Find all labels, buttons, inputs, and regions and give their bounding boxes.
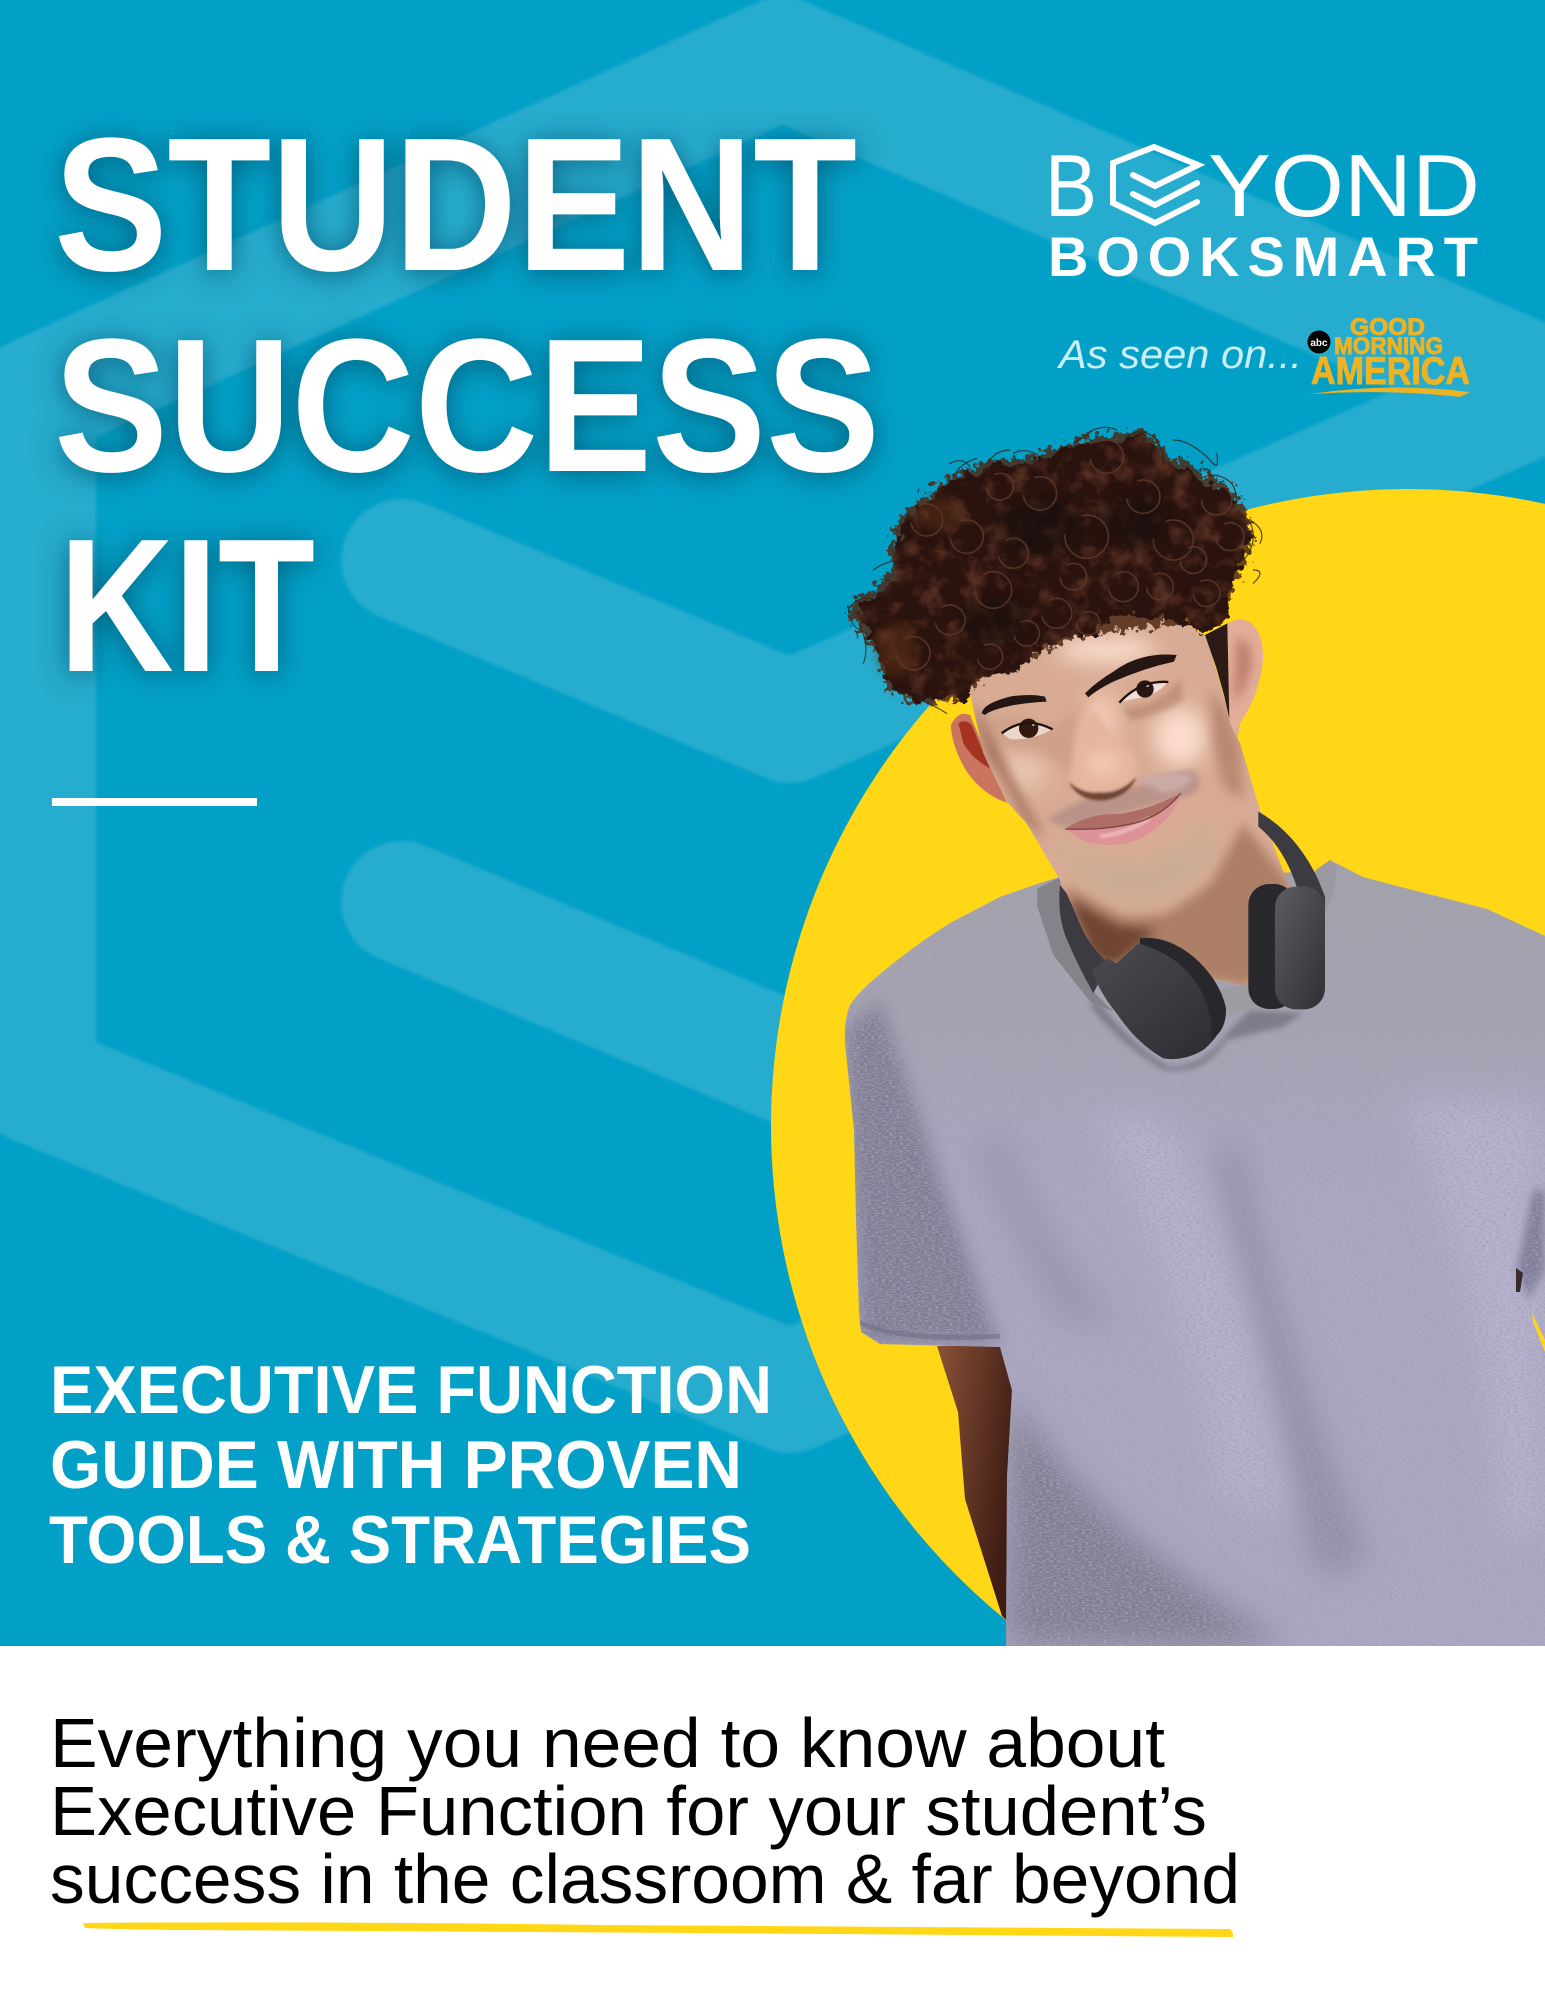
as seen on: As seen on... xyxy=(1057,333,1302,377)
icon: book hexagon xyxy=(1113,147,1198,223)
head and neck skin xyxy=(970,610,1293,987)
left ear xyxy=(951,714,1007,803)
frizz outline xyxy=(847,431,1252,703)
main curls mass xyxy=(857,437,1248,700)
logo: Good Morning America: MORNING xyxy=(1334,333,1443,360)
subtitle: TOOLS & STRATEGIES xyxy=(49,1502,751,1578)
t-shirt xyxy=(840,860,1545,1650)
flyaway strands xyxy=(848,427,1262,713)
photo: student with headphones xyxy=(840,427,1545,1650)
subtitle: GUIDE WITH PROVEN xyxy=(50,1427,742,1503)
yellow underline xyxy=(83,1922,1233,1937)
tagline: Executive Function for your student’s xyxy=(50,1772,1207,1850)
tagline xyxy=(50,1704,1240,1918)
title: KIT xyxy=(59,500,315,712)
logo: Beyond BookSmart: B xyxy=(1045,136,1097,235)
subtitle: EXECUTIVE FUNCTION xyxy=(50,1352,772,1428)
title: SUCCESS xyxy=(54,300,880,512)
yellow circle xyxy=(771,489,1545,1763)
right eye xyxy=(1119,680,1168,703)
headphone right cup xyxy=(1248,884,1325,1009)
white footer panel xyxy=(0,1646,1545,2000)
subtitle xyxy=(49,1352,772,1578)
mouth xyxy=(1065,793,1181,845)
yellow sliver at right xyxy=(1532,1313,1545,1352)
curl shading xyxy=(877,493,1170,677)
logo: Good Morning America: AMERICA xyxy=(1311,350,1470,393)
right ear xyxy=(1225,620,1263,743)
nose xyxy=(1068,710,1137,800)
eyebrows xyxy=(982,655,1177,715)
hair xyxy=(847,427,1262,713)
logo: Good Morning America xyxy=(1308,314,1470,397)
title xyxy=(54,99,880,712)
tagline: success in the classroom & far beyond xyxy=(50,1840,1240,1918)
logo: Beyond BookSmart: BOOKSMART xyxy=(1048,225,1478,288)
headphone band xyxy=(1059,812,1325,993)
curl strands xyxy=(897,440,1244,670)
face shading xyxy=(970,637,1293,987)
icon: abc badge: abc xyxy=(1310,338,1328,349)
left eye xyxy=(1002,719,1053,739)
logo: Beyond BookSmart: YOND xyxy=(1208,136,1480,235)
icon: abc badge xyxy=(1308,330,1330,354)
back arm xyxy=(937,1345,1012,1625)
logo: Beyond BookSmart xyxy=(1045,136,1480,288)
title divider xyxy=(52,798,257,806)
head, neck and headphones xyxy=(951,610,1337,1071)
watermark: large book logo xyxy=(35,58,1545,1392)
tagline: Everything you need to know about xyxy=(50,1704,1165,1782)
logo: Good Morning America: GOOD xyxy=(1350,314,1425,341)
title: STUDENT xyxy=(54,99,857,311)
sideburn xyxy=(1205,623,1229,718)
headphone left cup xyxy=(1092,938,1226,1059)
shadow of headphones on shirt xyxy=(1090,1000,1303,1071)
collar xyxy=(1037,860,1337,1017)
